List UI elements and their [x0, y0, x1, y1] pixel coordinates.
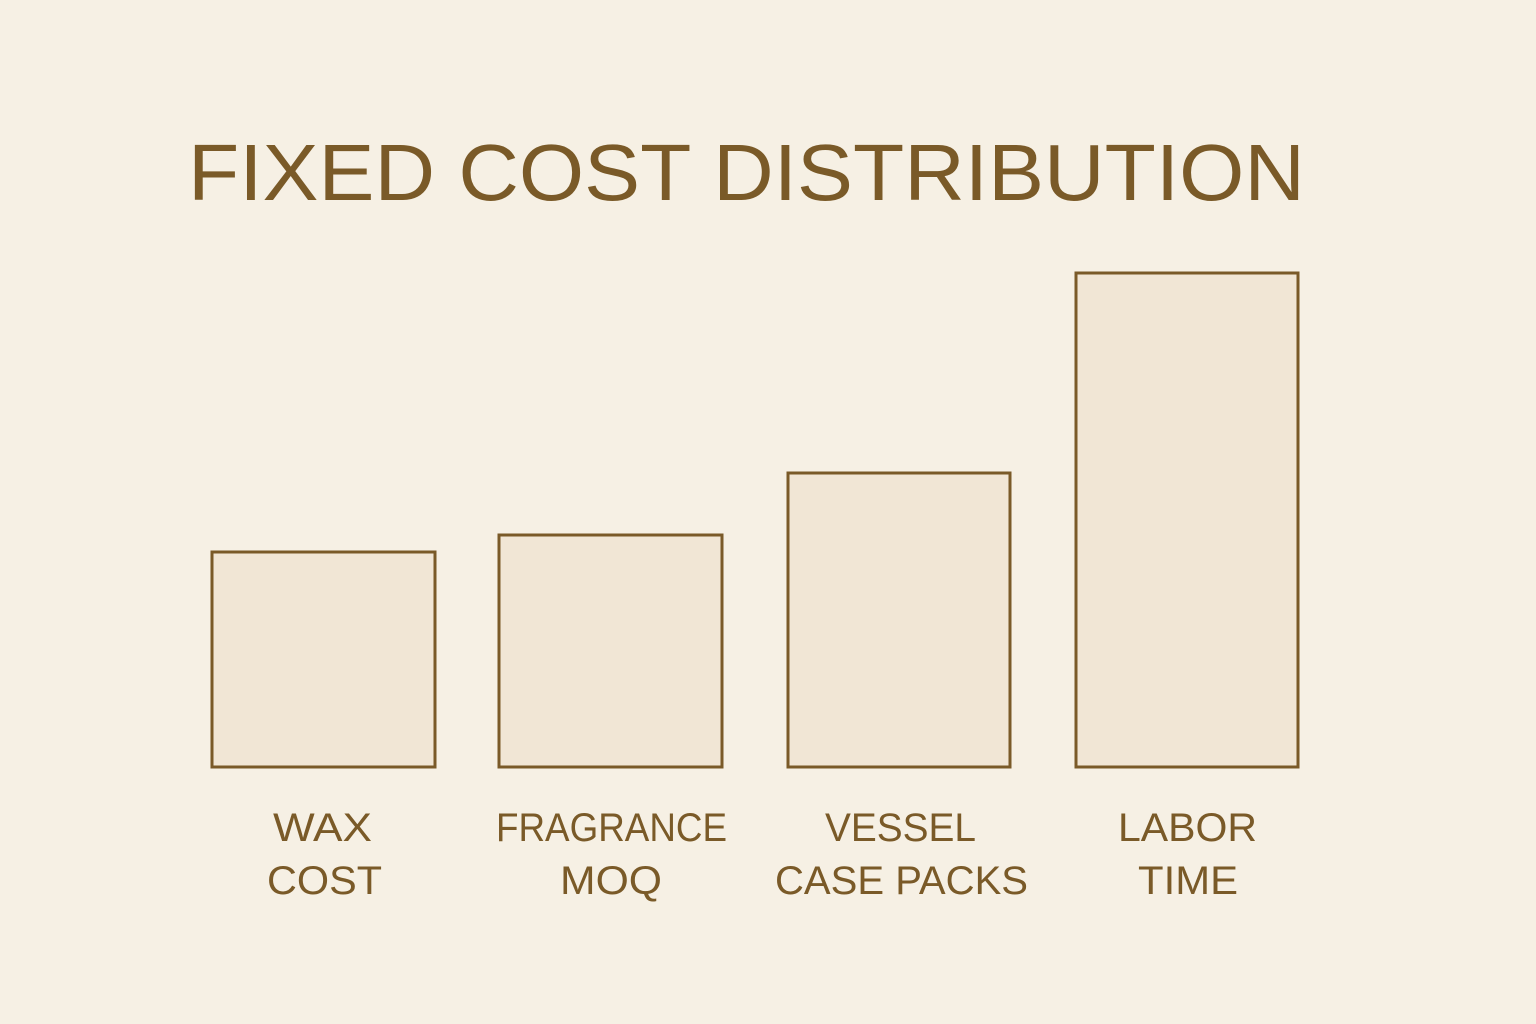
title: FIXED COST DISTRIBUTION [188, 128, 1305, 217]
label: vessel case packs: VESSEL [825, 806, 976, 850]
bar: fragrance moq [499, 535, 722, 767]
bar: labor time [1076, 273, 1298, 767]
label: vessel case packs [775, 806, 1028, 903]
label: labor time: LABOR [1118, 806, 1257, 850]
label: wax cost: WAX [273, 806, 372, 850]
bar chart [212, 273, 1298, 767]
label: vessel case packs: CASE PACKS [775, 859, 1028, 903]
label: wax cost: COST [267, 859, 382, 903]
label: wax cost [267, 806, 382, 903]
label: fragrance moq: FRAGRANCE [496, 806, 727, 850]
label: labor time [1118, 806, 1257, 903]
label: labor time: TIME [1138, 859, 1238, 903]
bar: wax cost [212, 552, 435, 767]
label: fragrance moq: MOQ [560, 859, 662, 903]
label: fragrance moq [496, 806, 727, 903]
bar: vessel case packs [788, 473, 1010, 767]
